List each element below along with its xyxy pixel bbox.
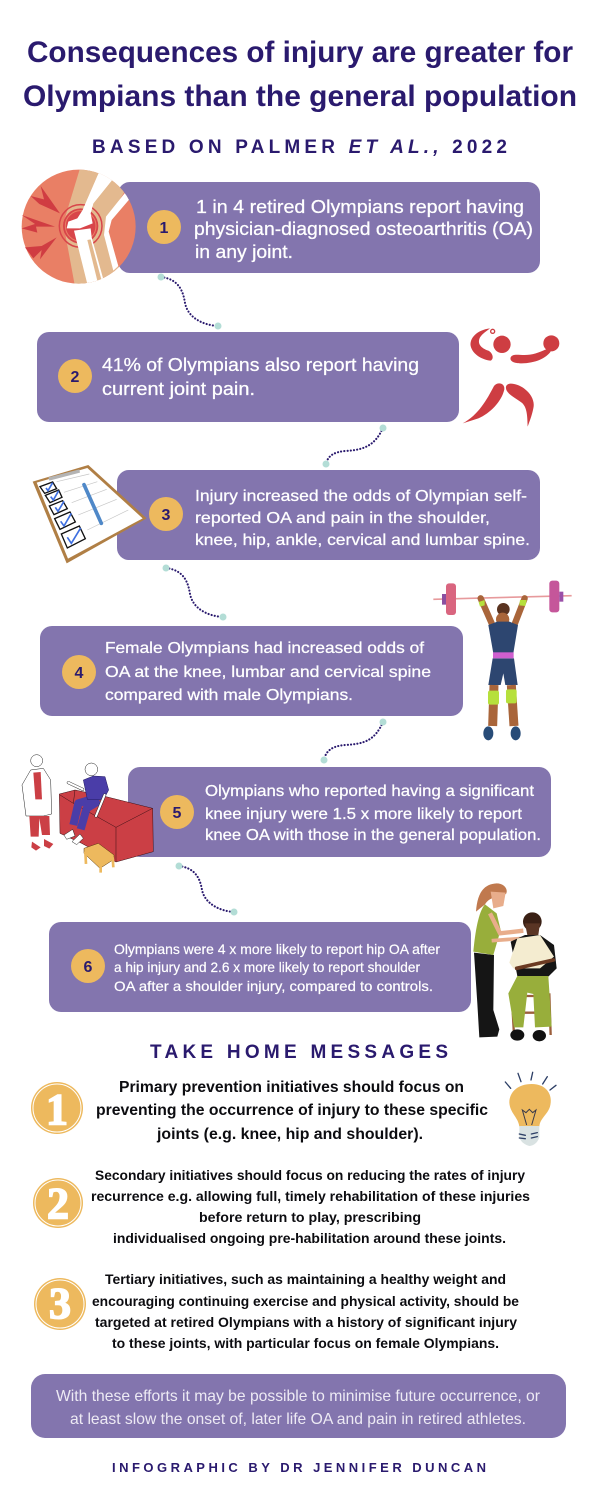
text 1: 1 in 4 retired Olympians report having xyxy=(196,197,524,217)
text: primary prevention xyxy=(96,1079,488,1143)
medal 1 xyxy=(31,1082,83,1134)
message 3 xyxy=(34,1271,519,1351)
icon: olympic pictogram athlete xyxy=(463,328,559,427)
badge 4: 4 xyxy=(75,665,84,682)
badge 3 xyxy=(149,497,183,531)
medal 1: 1 xyxy=(46,1085,68,1134)
title: Olympians than the general population xyxy=(23,80,577,113)
text: tertiary initiatives xyxy=(92,1271,519,1351)
title xyxy=(23,36,577,113)
badge 1: 1 xyxy=(160,220,169,237)
conclusion panel: at least slow the onset of, later life OA and pain in retired athletes. xyxy=(70,1411,526,1428)
badge 3: 3 xyxy=(162,507,171,524)
message 1 xyxy=(31,1079,488,1143)
badge 2 xyxy=(58,359,92,393)
text 3: reported OA and pain in the shoulder, xyxy=(195,510,490,527)
text: secondary initiatives: Secondary initiatives should focus on reducing the rates of injury xyxy=(95,1167,525,1183)
text 3 xyxy=(195,488,530,549)
text: primary prevention: preventing the occurrence of injury to these specific xyxy=(96,1102,488,1119)
icon: painful knee xyxy=(22,168,136,287)
icon: clipboard checklist xyxy=(33,465,147,563)
footer credit: INFOGRAPHIC BY DR JENNIFER DUNCAN xyxy=(112,1460,486,1475)
text: tertiary initiatives: encouraging continuing exercise and physical activity, should be xyxy=(92,1293,519,1309)
text: tertiary initiatives: Tertiary initiatives, such as maintaining a healthy weight and xyxy=(105,1271,506,1287)
text: secondary initiatives xyxy=(91,1167,530,1246)
connector 4 to 5 xyxy=(320,718,386,764)
text: secondary initiatives: individualised ongoing pre-habilitation around these joints. xyxy=(113,1230,506,1246)
text 1: in any joint. xyxy=(195,242,293,262)
text 4: compared with male Olympians. xyxy=(105,687,353,704)
text 1 xyxy=(194,197,533,262)
panel 6: hip and shoulder xyxy=(49,922,471,1012)
panel 2: joint pain xyxy=(37,332,459,422)
text 3: knee, hip, ankle, cervical and lumbar spine. xyxy=(195,532,530,549)
text 4: Female Olympians had increased odds of xyxy=(105,640,425,657)
text 6: a hip injury and 2.6 x more likely to report shoulder xyxy=(114,959,420,975)
message 2 xyxy=(33,1167,530,1246)
icon: carer applying arm sling xyxy=(473,883,557,1041)
connector 1 to 2 xyxy=(158,274,222,330)
panel 5: knee injury xyxy=(128,767,551,857)
text 5: Olympians who reported having a significant xyxy=(205,783,535,800)
icon: light bulb xyxy=(505,1072,556,1146)
text 4 xyxy=(105,640,431,704)
connector 5 to 6 xyxy=(176,862,238,916)
icon: weightlifter xyxy=(433,581,572,740)
text 5: knee injury were 1.5 x more likely to report xyxy=(205,806,523,823)
medal 3 xyxy=(34,1278,86,1330)
text: tertiary initiatives: targeted at retired Olympians with a history of significant injury xyxy=(95,1314,517,1330)
text: tertiary initiatives: to these joints, with particular focus on female Olympians. xyxy=(112,1335,499,1351)
conclusion panel: With these efforts it may be possible to minimise future occurrence, or xyxy=(56,1388,541,1405)
badge 5 xyxy=(160,795,194,829)
panel 4: female Olympians xyxy=(40,626,463,716)
badge 2: 2 xyxy=(71,369,80,386)
connector 2 to 3 xyxy=(322,424,386,468)
medal 3: 3 xyxy=(49,1279,71,1328)
heading: take home messages: TAKE HOME MESSAGES xyxy=(150,1042,448,1063)
text 6: Olympians were 4 x more likely to report hip OA after xyxy=(114,941,440,957)
text: primary prevention: joints (e.g. knee, hip and shoulder). xyxy=(156,1126,423,1143)
text: secondary initiatives: recurrence e.g. allowing full, timely rehabilitation of these injuries xyxy=(91,1188,530,1204)
badge 1 xyxy=(147,210,181,244)
connector 3 to 4 xyxy=(162,564,226,620)
badge 6: 6 xyxy=(84,959,93,976)
subtitle: citation: BASED ON PALMER ET AL., 2022 xyxy=(92,137,507,158)
badge 6 xyxy=(71,949,105,983)
title: Consequences of injury are greater for xyxy=(27,36,573,69)
text 2 xyxy=(102,355,419,399)
text 4: OA at the knee, lumbar and cervical spine xyxy=(105,664,431,681)
badge 5: 5 xyxy=(173,805,182,822)
badge 4 xyxy=(62,655,96,689)
text: primary prevention: Primary prevention initiatives should focus on xyxy=(119,1079,464,1096)
text 1: physician-diagnosed osteoarthritis (OA) xyxy=(194,219,533,239)
text 6 xyxy=(114,941,440,994)
text 6: OA after a shoulder injury, compared to controls. xyxy=(114,978,433,994)
text 2: 41% of Olympians also report having xyxy=(102,355,419,375)
conclusion panel xyxy=(31,1374,566,1438)
text 3: Injury increased the odds of Olympian self- xyxy=(195,488,527,505)
text 5: knee OA with those in the general population. xyxy=(205,827,541,844)
medal 2 xyxy=(33,1178,83,1228)
text: secondary initiatives: before return to play, prescribing xyxy=(199,1209,421,1225)
medal 2: 2 xyxy=(47,1179,69,1228)
text 5 xyxy=(205,783,541,844)
text 2: current joint pain. xyxy=(102,379,255,399)
panel 1: osteoarthritis prevalence xyxy=(118,182,540,273)
icon: doctor and patient on exam table xyxy=(22,755,153,873)
panel 3: injury odds xyxy=(117,470,540,560)
